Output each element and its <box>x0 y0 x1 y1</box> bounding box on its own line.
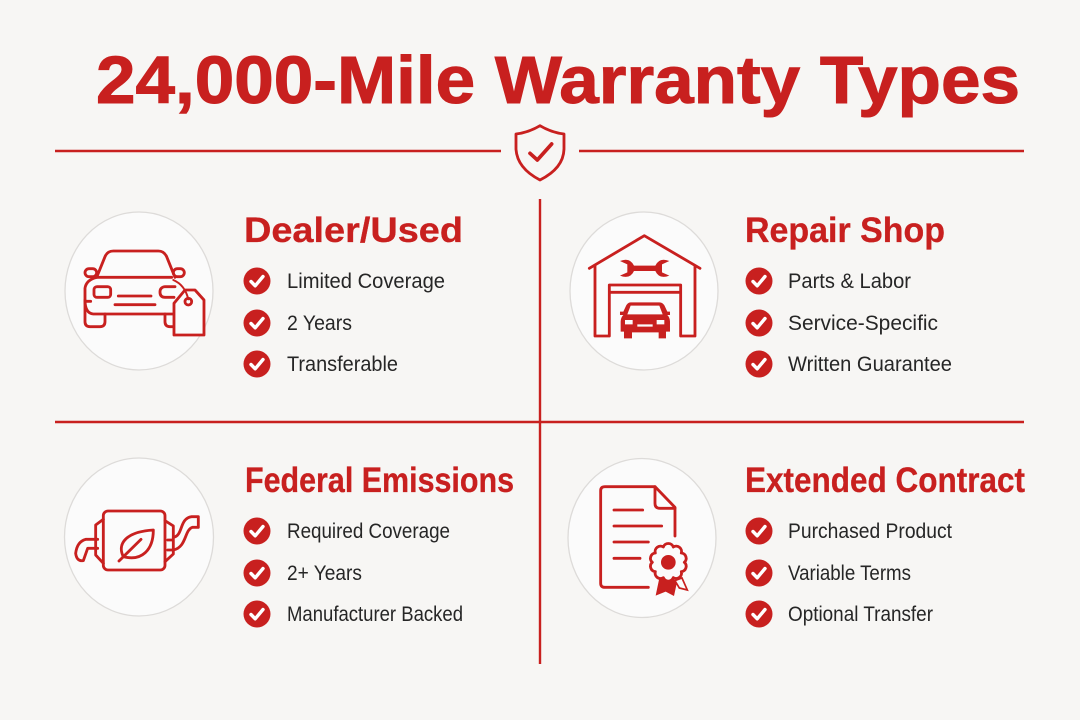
list: features: Limited Coverage <box>287 270 445 293</box>
list: features: Written Guarantee <box>788 353 952 376</box>
heading: Federal Emissions <box>245 461 514 500</box>
list: features: Transferable <box>287 353 398 376</box>
icon: document with ribbon seal <box>568 458 716 618</box>
list: features: Purchased Product <box>788 520 952 543</box>
icon: garage with wrench and car <box>570 212 718 370</box>
heading: Repair Shop <box>745 211 945 250</box>
panel: repair shop <box>570 211 952 378</box>
list: features: Service-Specific <box>788 312 938 335</box>
icon: shield with check <box>516 126 564 180</box>
list: features: Manufacturer Backed <box>287 603 463 626</box>
list: features <box>746 268 952 378</box>
panel: federal emissions <box>64 458 514 628</box>
heading: Dealer/Used <box>244 211 463 250</box>
title: 24,000-Mile Warranty Types <box>96 43 1020 118</box>
heading: Extended Contract <box>745 461 1025 500</box>
list: features <box>244 518 463 628</box>
list: features: 2+ Years <box>287 562 362 585</box>
icon: muffler with leaf <box>64 458 214 616</box>
panel: dealer/used <box>65 211 463 378</box>
list: features: Variable Terms <box>788 562 911 585</box>
list: features <box>746 518 952 628</box>
list: features: Optional Transfer <box>788 603 933 626</box>
icon: car with price tag <box>65 212 213 370</box>
list: features <box>244 268 445 378</box>
list: features: Parts & Labor <box>788 270 911 293</box>
list: features: Required Coverage <box>287 520 450 543</box>
panel: extended contract <box>568 458 1025 628</box>
list: features: 2 Years <box>287 312 352 335</box>
